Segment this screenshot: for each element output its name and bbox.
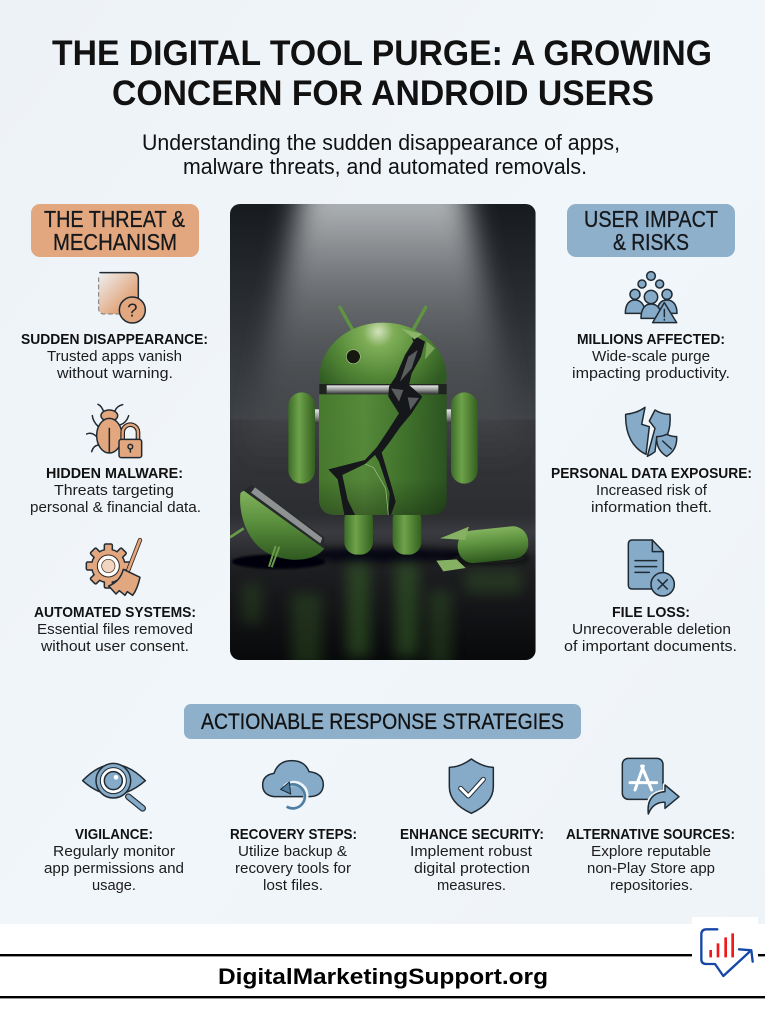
strategy: recovery steps: lost files. (263, 877, 323, 894)
heading: user impact and risks (567, 204, 735, 257)
crack (328, 333, 425, 515)
strategy: vigilance: VIGILANCE: (75, 826, 153, 843)
item: millions affected: impacting productivity. (572, 365, 730, 382)
legs (344, 507, 373, 555)
title: THE DIGITAL TOOL PURGE: A GROWING (52, 34, 712, 73)
strategy: recovery steps (230, 761, 357, 894)
icon: shield with check (449, 759, 493, 813)
heading: user impact and risks: & RISKS (613, 229, 689, 255)
item: millions affected: MILLIONS AFFECTED: (577, 331, 725, 348)
title: CONCERN FOR ANDROID USERS (112, 74, 654, 113)
footer band (0, 917, 765, 1024)
body (319, 394, 447, 515)
strategy: enhance security: measures. (437, 877, 506, 894)
strategy: recovery steps: Utilize backup & (238, 843, 347, 860)
strategy: vigilance (44, 763, 184, 894)
strategy: alternative sources: Explore reputable (591, 843, 711, 860)
item: sudden disappearance: without warning. (56, 365, 173, 382)
item: file loss: of important documents. (564, 638, 737, 655)
item: file loss: Unrecoverable deletion (572, 621, 731, 638)
item: sudden disappearance: Trusted apps vanish (47, 348, 182, 365)
item: automated systems: Essential files removed (37, 621, 193, 638)
strategy: enhance security: digital protection (414, 860, 530, 877)
icon: gear with broom (86, 540, 140, 595)
strategy: enhance security: Implement robust (410, 843, 533, 860)
footer band: DigitalMarketingSupport.org (218, 964, 548, 989)
reflections (242, 563, 522, 667)
icon: bug with padlock (87, 404, 142, 458)
broken arm piece (456, 525, 530, 565)
icon: eye with magnifier (83, 763, 145, 808)
strategy: vigilance: usage. (92, 877, 136, 894)
strategy: alternative sources: non-Play Store app (587, 860, 715, 877)
subtitle: malware threats, and automated removals. (183, 154, 587, 179)
heading: user impact and risks: USER IMPACT (584, 206, 718, 232)
item: hidden malware: HIDDEN MALWARE: (46, 465, 183, 482)
item: personal data exposure: Increased risk of (596, 482, 708, 499)
heading: the threat and mechanism: THE THREAT & (44, 206, 185, 232)
strategy: alternative sources: repositories. (610, 877, 693, 894)
logo: chart in speech bubble (701, 929, 753, 976)
item: personal data exposure: information theft. (591, 499, 712, 516)
heading: the threat and mechanism (31, 204, 199, 257)
icon: app store with arrow (622, 758, 679, 814)
central illustration: cracked android robot (230, 180, 536, 667)
item: hidden malware: personal & financial data. (30, 499, 201, 516)
strategy: recovery steps: RECOVERY STEPS: (230, 826, 357, 843)
item: personal data exposure (551, 407, 752, 516)
strategy: recovery steps: recovery tools for (235, 860, 351, 877)
icon: crowd with warning triangle (625, 272, 677, 323)
icon: document with x (628, 540, 674, 596)
strategy: alternative sources (566, 758, 735, 894)
item: sudden disappearance: SUDDEN DISAPPEARANCE: (21, 331, 208, 348)
item: automated systems: AUTOMATED SYSTEMS: (34, 604, 196, 621)
strategy: enhance security (400, 759, 544, 894)
item: sudden disappearance (21, 273, 208, 382)
strategy: vigilance: app permissions and (44, 860, 184, 877)
item: personal data exposure: PERSONAL DATA EXPOSURE: (551, 465, 752, 482)
connectors (313, 409, 321, 423)
item: automated systems: without user consent. (40, 638, 189, 655)
broken head piece (240, 491, 324, 560)
strategy: vigilance: Regularly monitor (53, 843, 175, 860)
icon: fading app with question mark: ? (127, 300, 138, 321)
item: automated systems (34, 540, 196, 655)
item: file loss: FILE LOSS: (612, 604, 690, 621)
heading: the threat and mechanism: MECHANISM (53, 229, 177, 255)
icon: cloud with restore arrow (263, 761, 323, 808)
antennae (340, 307, 426, 329)
heading: actionable response strategies: ACTIONABLE RESPONSE STRATEGIES (201, 709, 564, 734)
item: hidden malware (30, 404, 201, 516)
subtitle (142, 130, 620, 179)
icon: fading app with question mark (99, 273, 145, 323)
band (319, 384, 447, 394)
item: file loss (564, 540, 737, 655)
head (319, 323, 447, 384)
strategy: alternative sources: ALTERNATIVE SOURCES: (566, 826, 735, 843)
item: millions affected (572, 272, 730, 382)
heading: actionable response strategies (184, 704, 581, 739)
item: millions affected: Wide-scale purge (592, 348, 710, 365)
item: hidden malware: Threats targeting (54, 482, 174, 499)
arms (288, 392, 315, 484)
strategy: enhance security: ENHANCE SECURITY: (400, 826, 544, 843)
icon: cracked shield (626, 407, 677, 456)
title (52, 34, 712, 113)
subtitle: Understanding the sudden disappearance of apps, (142, 130, 620, 155)
